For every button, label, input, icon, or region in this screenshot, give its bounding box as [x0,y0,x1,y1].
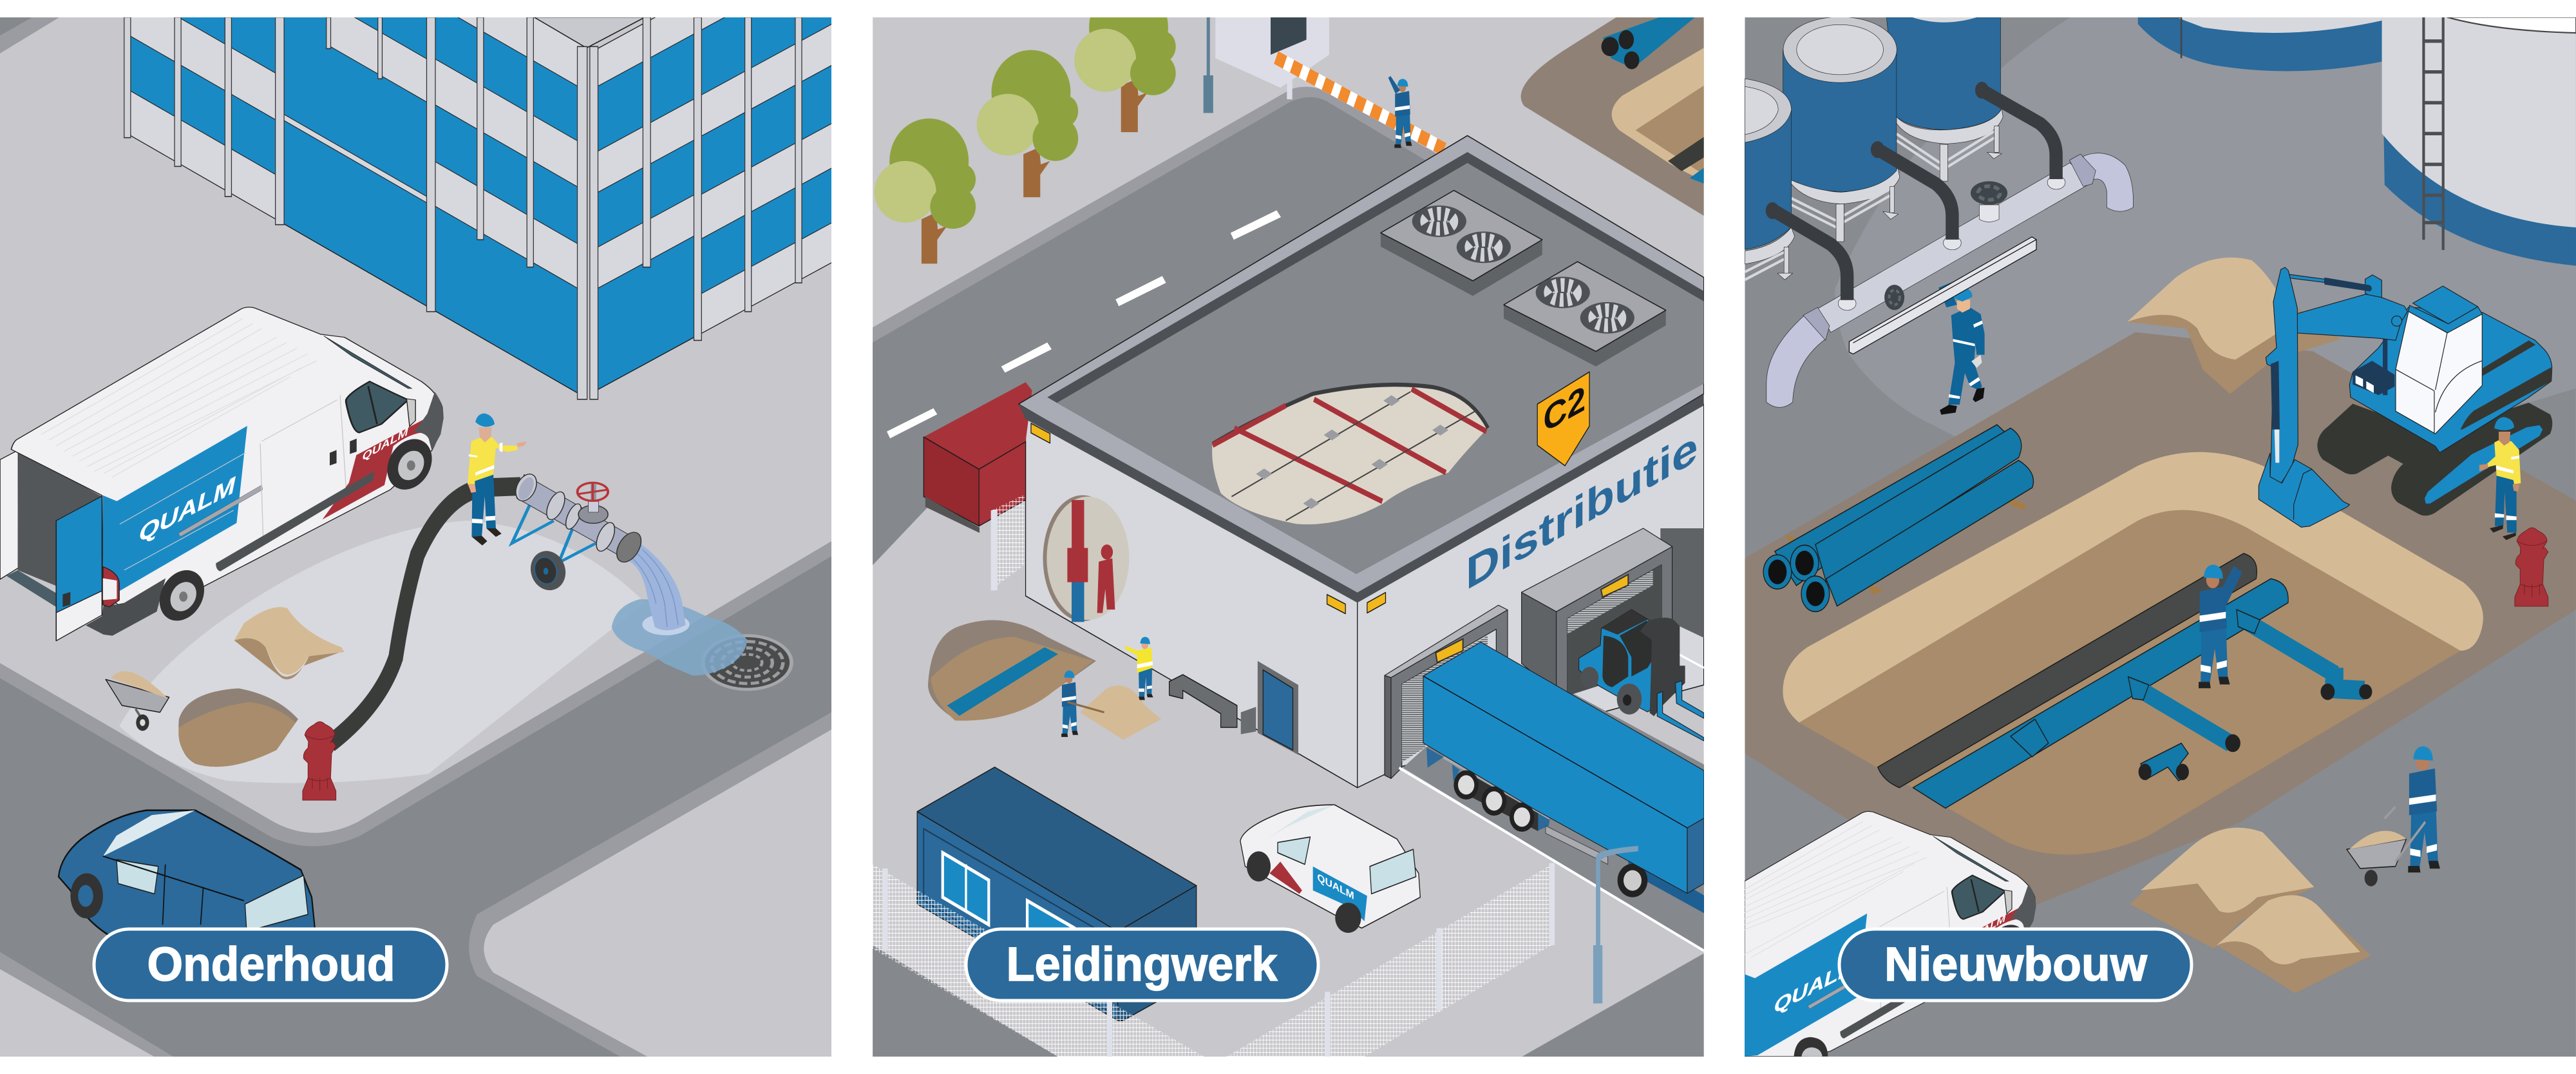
dirt hole [178,688,298,767]
QUALM van: QUALM [363,425,408,463]
excavator with worker and hydrant [2259,267,2552,606]
wheelbarrow [106,671,169,731]
blue car [59,810,316,935]
excavation with blue pipe [928,620,1096,721]
QUALM van: QUALM [139,472,236,548]
stand [512,504,596,562]
security fence [873,495,1555,1057]
QUALM van [1745,811,2036,1057]
rear axle [1618,850,1792,962]
Distributie sign: Distributie [1466,420,1698,600]
lamp post right [1593,846,1638,1003]
dirt ground [1745,332,2576,908]
white van small: QUALM [1317,871,1354,903]
wall cut-away with valve [1043,495,1129,622]
loading dock 1 [1385,605,1508,778]
worker carrying beam [1849,237,2036,415]
roof cut-away [1212,385,1488,524]
worker in yellow [468,414,527,546]
QUALM van [0,307,444,641]
sand pile [234,607,345,679]
QUALM van: QUALM [1774,953,1857,1018]
worker with wheelbarrow [2347,746,2440,887]
white van small [1240,805,1420,933]
large storage tanks [2138,17,2576,265]
rooftop fan unit [1381,191,1542,296]
office building [124,0,835,399]
label pill: Onderhoud: Onderhoud [147,937,395,991]
manhole [701,634,793,691]
worker in yellow [1125,637,1153,700]
C2 shield [1537,372,1589,466]
label pill: Leidingwerk [966,929,1318,1001]
label pill: Nieuwbouw [1839,929,2192,1001]
excavation pit [1783,452,2483,855]
small tanks, manifold and beam carrier [1745,17,2133,415]
C2 shield: C2 [1543,378,1586,441]
sand piles [2130,828,2371,993]
hose [330,486,520,743]
worker in yellow [2479,417,2521,540]
panel: Nieuwbouw scene [1745,17,2576,1057]
distribution building [923,135,1704,788]
semi trailer [1423,642,1704,894]
worker with shovel [1061,671,1104,737]
sand heap [1080,686,1161,740]
puddle [612,599,747,675]
pipe [515,474,641,563]
work area [119,521,645,783]
bench [1170,675,1237,727]
guard booth [1215,17,1329,99]
loading dock 2 [1522,528,1704,696]
label pill: Onderhoud [94,929,447,1001]
worker in pit [2199,564,2242,688]
dirt area with sand and pipes top right [1521,17,1704,216]
valve, worker and water jet [468,414,793,691]
wheel [531,551,565,590]
label pill: Leidingwerk: Leidingwerk [1006,937,1278,991]
forklift [1579,609,1704,741]
panel: Onderhoud scene [0,0,835,1057]
barrier [1276,57,1444,149]
blue pipe in pit [1913,579,2288,808]
tee fitting [2139,743,2189,781]
tree [977,50,1078,197]
QUALM van: QUALM [1966,912,2006,946]
fire hydrant [2515,528,2548,606]
lamp post [1204,17,1213,113]
yard markings and road corner [873,768,1704,1057]
door [1258,661,1298,755]
wall lights [1031,423,1385,614]
fire hydrant [303,722,336,800]
yard apron, docks, forklift and truck [1385,528,1792,962]
worker at barrier [1388,76,1412,148]
stacked blue pipes [1763,425,2033,611]
rooftop fan unit [1504,262,1666,367]
back tank [1886,17,2003,181]
branch pipes [2138,620,2365,743]
left tank [1745,79,1795,280]
red trailer behind [923,382,1032,533]
black pipe in pit [1878,553,2257,788]
label pill: Nieuwbouw: Nieuwbouw [1884,937,2147,991]
tree [1074,17,1176,133]
tree [875,119,976,264]
water jet [624,542,690,635]
panel: Leidingwerk scene [873,17,1704,1057]
manifold pipe [1766,82,2133,407]
middle tank [1783,17,1900,242]
sand pile behind excavator [2127,258,2341,394]
site container [917,767,1197,1021]
excavator [2259,267,2552,527]
road with dashes [873,87,1437,565]
